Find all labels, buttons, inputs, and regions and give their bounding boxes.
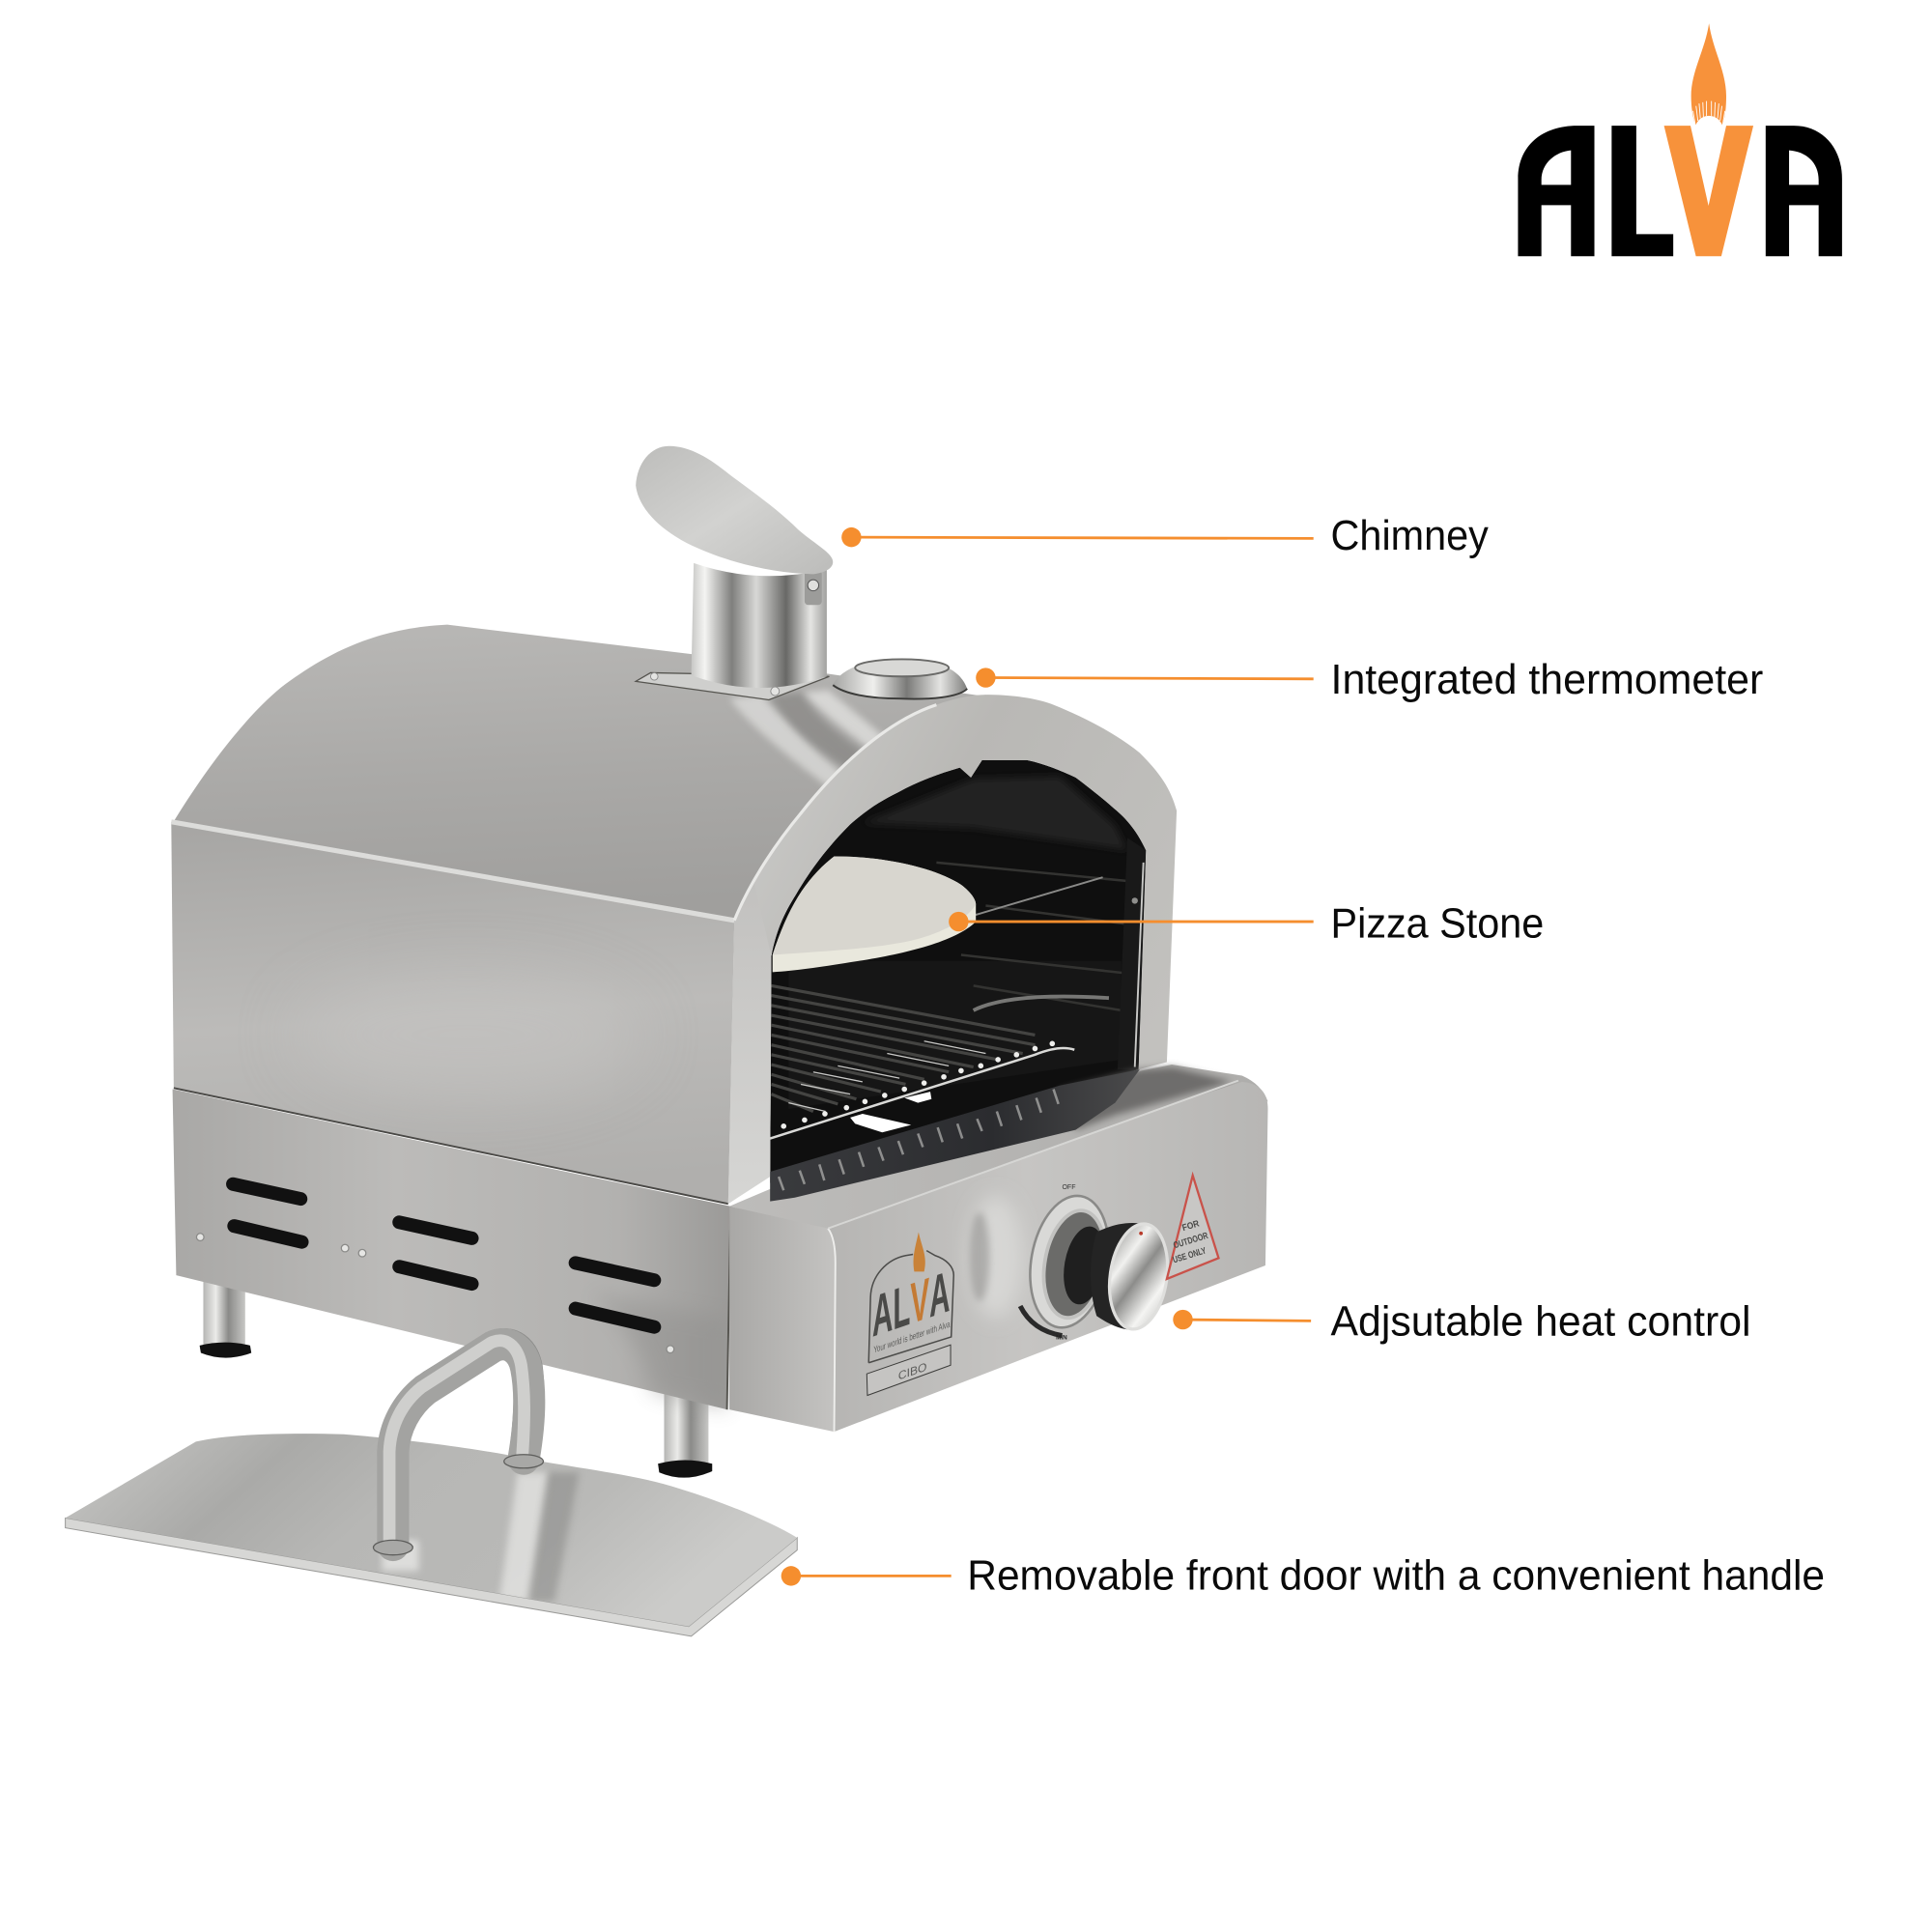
- outdoor-use warning triangle: FOR: [1181, 1218, 1201, 1234]
- lower box with vents: [173, 1090, 730, 1409]
- callout: integrated thermometer: Integrated thermometer: [1331, 657, 1763, 703]
- panel dimple: [969, 1195, 1023, 1319]
- oven side and dome shell: [171, 625, 992, 1204]
- callout: adjustable heat control: Adjsutable heat control: [1331, 1299, 1750, 1346]
- callout: chimney: Chimney: [1331, 513, 1489, 559]
- chimney base plate: [636, 672, 829, 699]
- chimney cap: [636, 446, 833, 574]
- panel top surface: [729, 1065, 1267, 1233]
- callout: pizza stone: Pizza Stone: [1331, 901, 1544, 948]
- roof shine from chimney: [730, 696, 838, 786]
- burner lip shading: [1060, 1067, 1233, 1130]
- control knob: [1020, 1189, 1174, 1334]
- panel left side face: [729, 1207, 836, 1432]
- infographic canvas: [65, 23, 1842, 1636]
- outdoor-use warning triangle: USE ONLY: [1172, 1245, 1208, 1265]
- removable front door with handle: [66, 1341, 797, 1636]
- grill bars: [771, 985, 1035, 1112]
- callout: removable front door: Removable front door with a convenient handle: [967, 1552, 1825, 1599]
- callout: integrated thermometer: [976, 657, 1763, 703]
- gap under rack: [850, 1114, 911, 1132]
- outdoor-use warning triangle: OUTDOOR: [1172, 1231, 1209, 1251]
- mini ALVA logo on panel: Your world is better with Alva: [873, 1320, 951, 1355]
- illustration: stainless pizza oven: [66, 446, 1267, 1636]
- door plate: [66, 1434, 797, 1627]
- vent slots: [233, 1184, 654, 1327]
- callout: pizza stone: [949, 901, 1544, 948]
- burner glass band: [770, 1069, 1140, 1202]
- callout: chimney: [841, 513, 1489, 559]
- crease highlight: [171, 822, 734, 921]
- mini ALVA logo on panel: ALVA: [872, 1259, 950, 1350]
- chimney pipe: [692, 563, 827, 688]
- front leg right: [658, 1392, 712, 1478]
- pizza stone: [773, 856, 976, 972]
- interior back tones: [863, 777, 1127, 850]
- front rack rail: [770, 1048, 1074, 1139]
- gas ring arc and MIN label: MIN: [1056, 1334, 1067, 1341]
- logo letter A right: [1766, 126, 1842, 256]
- logo: ALVA: [1518, 23, 1842, 256]
- thermometer: [833, 659, 967, 699]
- CIBO model plate: [867, 1345, 951, 1396]
- logo letter A: [1518, 126, 1595, 256]
- chimney bracket screw: [805, 571, 822, 605]
- rack bar ends: [781, 1041, 1055, 1129]
- door edge: [66, 1518, 797, 1636]
- screws: [196, 1234, 674, 1353]
- mini ALVA logo on panel: [867, 1233, 953, 1396]
- right black inner strip: [1118, 838, 1146, 1069]
- rear leg left: [200, 1275, 251, 1358]
- logo flame: [1691, 23, 1726, 126]
- panel front face: [828, 1082, 1267, 1432]
- arched front frame: [728, 695, 1177, 1204]
- oven interior: [770, 760, 1146, 1182]
- logo letter V: [1664, 126, 1753, 256]
- gas ring arc and MIN label: [1020, 1306, 1067, 1341]
- control panel: [729, 1065, 1267, 1432]
- chimney: [636, 446, 833, 699]
- outdoor-use warning triangle: [1167, 1176, 1218, 1279]
- logo letter L: [1611, 126, 1673, 256]
- handle tube: [389, 1341, 529, 1545]
- mini ALVA logo on panel: CIBO: [898, 1360, 927, 1382]
- OFF label: OFF: [1062, 1184, 1075, 1191]
- handle collars: [373, 1540, 412, 1555]
